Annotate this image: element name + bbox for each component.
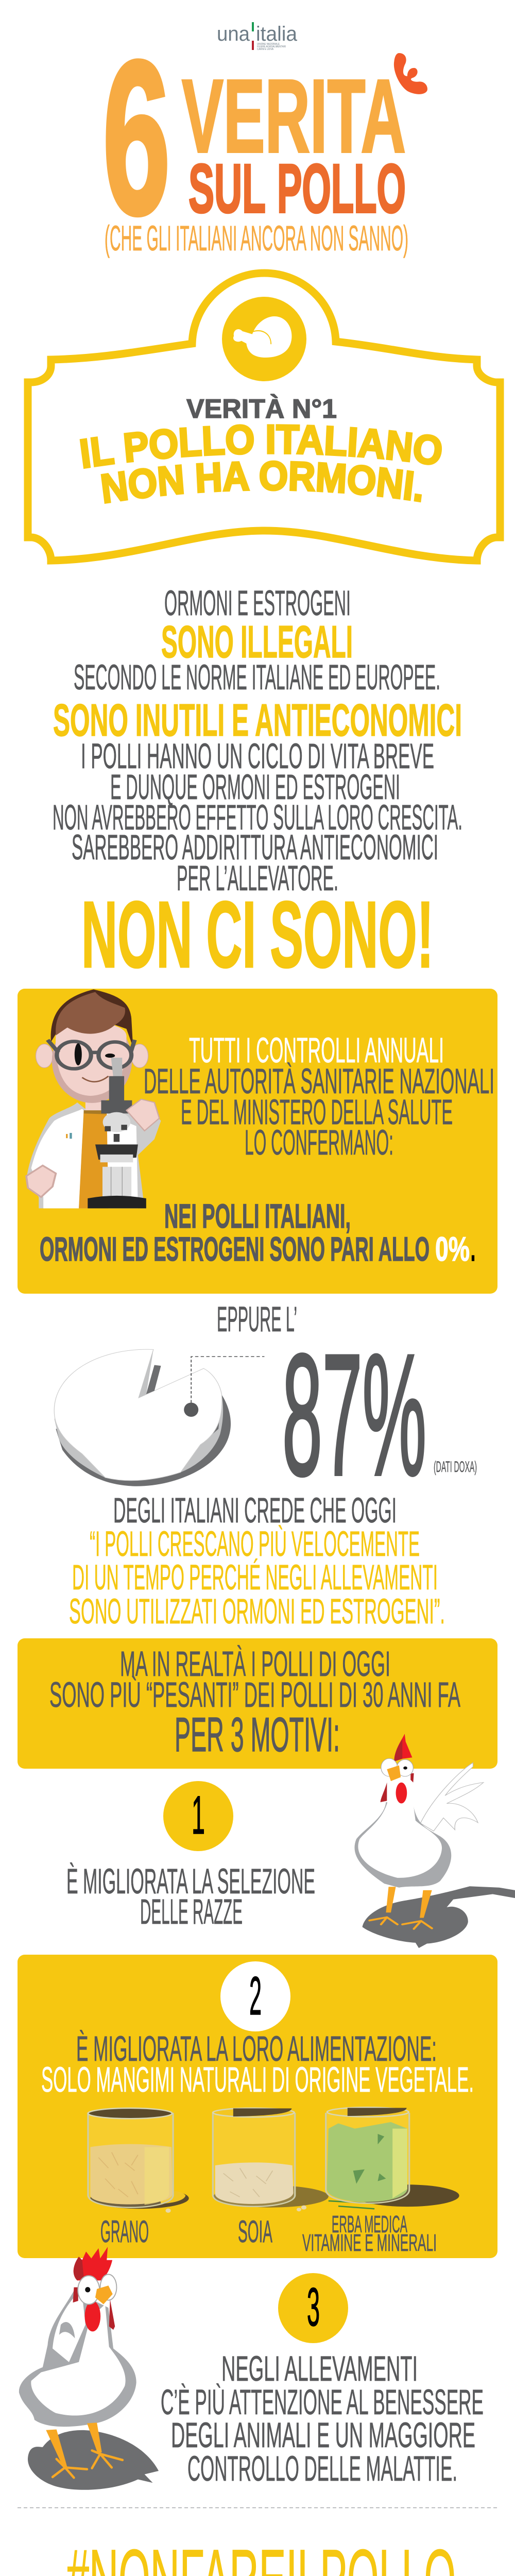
icon: number 1 [163, 1781, 233, 1851]
icon: number 3: 3 [307, 2277, 320, 2337]
jar: soia [213, 2108, 329, 2211]
logo: unaitalia: italia [256, 23, 298, 45]
icon: orange splash [394, 53, 427, 94]
arched headline line 2: NON HA ORMONI. [101, 461, 422, 504]
panel: controlli: . [471, 1230, 475, 1268]
icon: scientist with microscope [26, 989, 161, 1208]
icon: rooster 2 [19, 2247, 159, 2490]
icon: number 2: 2 [249, 1966, 262, 2026]
word pollo: POLLO [277, 150, 406, 227]
word sul: SUL [188, 150, 266, 227]
big number 6: 6 [102, 15, 170, 260]
badge heading: VERITÀ N°1 [186, 394, 337, 424]
panel: verità n.1 badge [24, 269, 504, 565]
jar: grano [88, 2108, 189, 2213]
heading: sono illegali: SONO ILLEGALI [161, 616, 353, 667]
icon: rooster 1 [354, 1734, 515, 1948]
logo: unaitalia [217, 22, 298, 51]
text: selezione delle razze: DELLE RAZZE [140, 1892, 243, 1931]
icon: number 2 [220, 1961, 290, 2031]
panel: controlli: 0% [435, 1230, 470, 1268]
text block: motivazione: PER L’ALLEVATORE. [177, 858, 338, 898]
text block: motivazione [53, 736, 462, 898]
arched headline line 1: IL POLLO ITALIANO [79, 424, 442, 469]
logo: unaitalia: FILIERE AGROALIMENTARI [257, 45, 286, 48]
icon: number 3 [278, 2273, 348, 2343]
logo: unaitalia: una [217, 23, 250, 45]
logo: unaitalia: UNIONE NAZIONALE [257, 43, 280, 46]
panel: 3 motivi: PER 3 MOTIVI: [175, 1707, 340, 1761]
panel: controlli [18, 989, 497, 1294]
panel: alimentazione: ERBA MEDICA [332, 2211, 407, 2238]
icon: chicken leg [222, 297, 306, 381]
panel: alimentazione: GRANO [100, 2214, 149, 2249]
chart: pie 87 percent [54, 1349, 264, 1486]
panel: alimentazione: SOIA [238, 2214, 272, 2249]
text: selezione delle razze [66, 1861, 315, 1931]
jar: erba medica [326, 2107, 459, 2209]
quote [69, 1524, 445, 1631]
text: benessere animali [161, 2349, 484, 2488]
panel: 3 motivi [18, 1638, 497, 1769]
text: EPPURE L’ [217, 1299, 297, 1339]
panel: alimentazione [18, 1955, 497, 2258]
logo: unaitalia: CARNI E UOVA [257, 48, 273, 51]
text: conclusione: NEI POLLI ITALIANI, [164, 1197, 351, 1235]
title: 6 verità sul pollo [102, 15, 427, 260]
jars of feed [88, 2107, 459, 2213]
icon: number 1: 1 [192, 1785, 205, 1845]
